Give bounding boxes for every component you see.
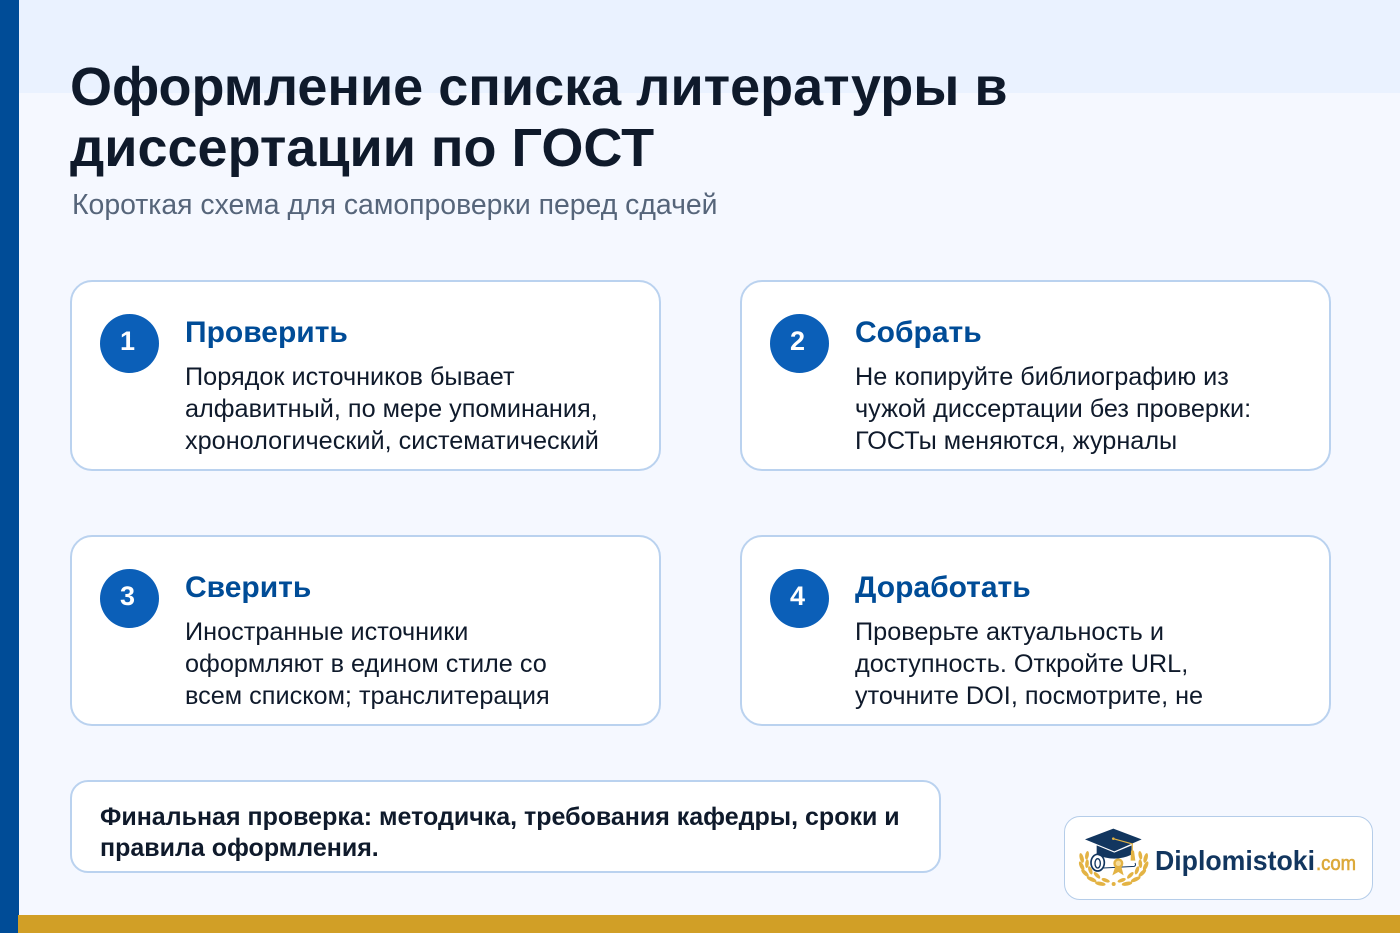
step 2 text: ГОСТы меняются, журналы bbox=[855, 427, 1177, 455]
panel: step 2 bbox=[740, 280, 1331, 471]
callout: final check: правила оформления. bbox=[100, 834, 379, 862]
step 2 heading: Собрать bbox=[855, 316, 982, 349]
bottom accent bar bbox=[18, 915, 1400, 933]
step 4 text: доступность. Откройте URL, bbox=[855, 650, 1188, 678]
icon: graduation cap with laurel bbox=[1078, 829, 1150, 887]
step 2 text bbox=[855, 363, 1251, 455]
step 2 text: Не копируйте библиографию из bbox=[855, 363, 1229, 391]
left accent bar bbox=[0, 0, 19, 933]
step 2 text: чужой диссертации без проверки: bbox=[855, 395, 1251, 423]
title: Оформление списка литературы в bbox=[70, 57, 1008, 117]
step 2 number bbox=[770, 314, 829, 373]
panel: step 4 bbox=[740, 535, 1331, 726]
step 4 text: Проверьте актуальность и bbox=[855, 618, 1164, 646]
callout: final check bbox=[70, 780, 941, 873]
step 2 number: 2 bbox=[790, 326, 805, 356]
step 1 text: хронологический, систематический bbox=[185, 427, 599, 455]
step 4 heading: Доработать bbox=[855, 571, 1031, 604]
panel: step 1 bbox=[70, 280, 661, 471]
step 4 text bbox=[855, 618, 1203, 710]
logo: Diplomistoki.com bbox=[1078, 828, 1356, 886]
callout: final check: Финальная проверка: методичка, требования кафедры, сроки и bbox=[100, 803, 900, 831]
step 4 number: 4 bbox=[790, 581, 805, 611]
step 1 text: алфавитный, по мере упоминания, bbox=[185, 395, 598, 423]
step 3 text: всем списком; транслитерация bbox=[185, 682, 550, 710]
title: диссертации по ГОСТ bbox=[70, 118, 654, 178]
subtitle: Короткая схема для самопроверки перед сдачей bbox=[72, 189, 718, 221]
logo card bbox=[1064, 816, 1373, 900]
step 3 number: 3 bbox=[120, 581, 135, 611]
step 3 text bbox=[185, 618, 550, 710]
step 1 text bbox=[185, 363, 599, 455]
step 4 number bbox=[770, 569, 829, 628]
header band bbox=[19, 0, 1400, 93]
step 3 heading: Сверить bbox=[185, 571, 311, 604]
step 3 text: оформляют в едином стиле со bbox=[185, 650, 547, 678]
logo domain: .com bbox=[1316, 853, 1356, 875]
panel: step 3 bbox=[70, 535, 661, 726]
title bbox=[70, 57, 1008, 178]
step 1 number bbox=[100, 314, 159, 373]
step 3 number bbox=[100, 569, 159, 628]
step 1 heading: Проверить bbox=[185, 316, 348, 349]
step 1 number: 1 bbox=[120, 326, 135, 356]
step 4 text: уточните DOI, посмотрите, не bbox=[855, 682, 1203, 710]
step 1 text: Порядок источников бывает bbox=[185, 363, 515, 391]
step 3 text: Иностранные источники bbox=[185, 618, 468, 646]
logo wordmark: Diplomistoki bbox=[1155, 845, 1315, 876]
